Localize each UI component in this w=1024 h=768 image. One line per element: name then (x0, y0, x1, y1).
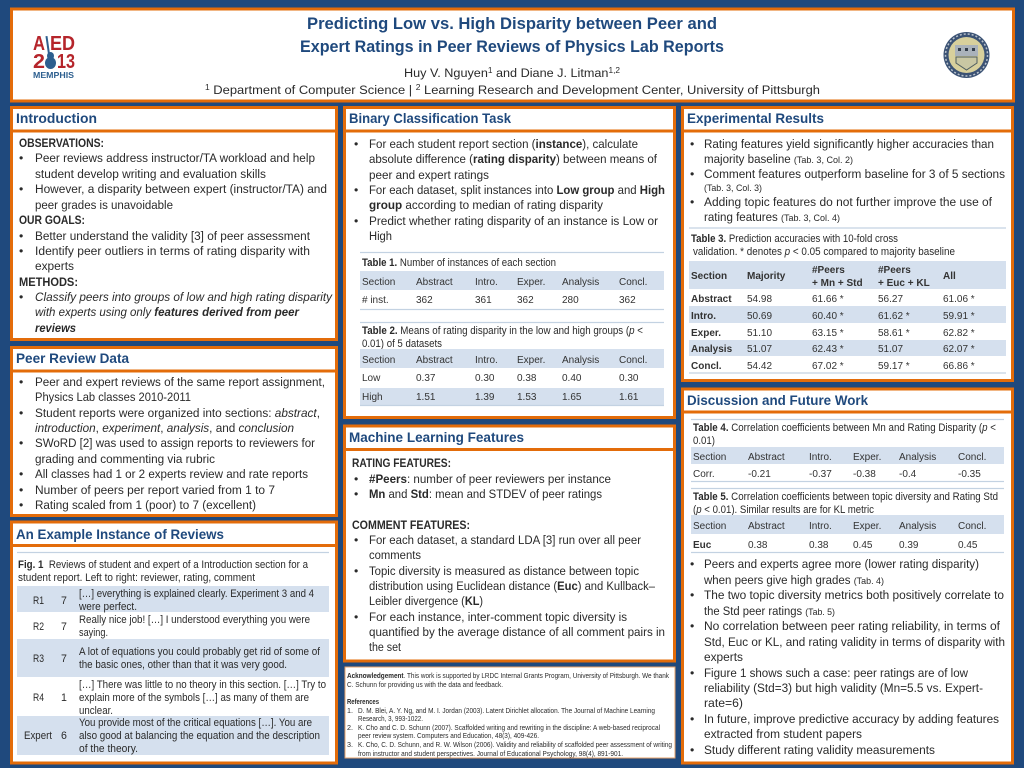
text block: observations, goals, methods: METHODS: (19, 275, 78, 289)
table 3: prediction accuracies: 54.98 (747, 294, 772, 305)
text block: discussion points: Figure 1 shows such a case: peer ratings are of low (704, 666, 968, 680)
table 1: instances per section: # inst. (362, 295, 389, 306)
text block: data description: Physics Lab classes 2010-2011 (35, 390, 191, 404)
table 5: correlation with rating std: Section (693, 521, 726, 532)
table: example reviews: of the theory. (79, 743, 138, 755)
panel: Introduction (10, 108, 338, 340)
table 2: means of rating disparity: 1.61 (619, 392, 639, 403)
table 3: prediction accuracies: #Peers (812, 265, 845, 276)
table 2: means of rating disparity: 0.40 (562, 373, 582, 384)
text block: results: rating features (Tab. 3, Col. 4) (704, 210, 840, 224)
text block: data description: Peer and expert reviews of the same report assignment, (35, 375, 325, 389)
text block: data description: • (19, 483, 23, 497)
text block: discussion points: extracted from student papers (704, 727, 862, 741)
references: 3. (347, 740, 353, 749)
table 3: prediction accuracies: Majority (747, 271, 786, 282)
text block: discussion points: Study different rating validity measurements (704, 743, 935, 757)
text block: rating and comment features: RATING FEATURES: (352, 456, 451, 470)
authors: 1 (488, 66, 493, 75)
text block: rating and comment features: • (354, 564, 358, 578)
affiliations: Learning Research and Development Center, University of Pittsburgh (420, 83, 820, 97)
text block: task description: group according to median of rating disparity (369, 198, 604, 212)
text block: discussion points: when peers give high grades (Tab. 4) (703, 573, 884, 587)
text block: task description: absolute difference (rating disparity) between means of (369, 152, 658, 166)
title (300, 14, 724, 56)
text block: observations, goals, methods: • (19, 182, 23, 196)
heading: Binary Classification Task: Binary Classification Task (349, 110, 511, 126)
text block: rating and comment features: Mn and Std: mean and STDEV of peer ratings (369, 487, 602, 501)
text block: rating and comment features: COMMENT FEATURES: (352, 518, 470, 532)
table 3: prediction accuracies: Section (691, 271, 727, 282)
text block: observations, goals, methods: Peer reviews address instructor/TA workload and help (35, 151, 315, 165)
icon: AIED 2013 Memphis logo: 13 (57, 51, 75, 73)
table: example reviews: 7 (61, 621, 67, 633)
text block: observations, goals, methods: • (19, 151, 23, 165)
table: example reviews: R1 (33, 595, 44, 607)
heading: An Example Instance of Reviews: An Example Instance of Reviews (16, 526, 224, 542)
text block: observations, goals, methods (19, 136, 333, 335)
references (347, 697, 672, 758)
table 1: instances per section: Exper. (517, 277, 545, 288)
table 2: means of rating disparity: 0.01) of 5 datasets (362, 338, 442, 350)
text block: results: • (690, 137, 694, 151)
table 3: prediction accuracies: 61.06 * (943, 294, 975, 305)
text block: data description: • (19, 406, 23, 420)
table 2: means of rating disparity: Analysis (562, 355, 599, 366)
references: K. Cho and C. D. Schunn (2007). Scaffolded writing and rewriting in the discipline: A web-based reciprocal (358, 723, 660, 732)
table 2: means of rating disparity: 1.65 (562, 392, 582, 403)
table 3: prediction accuracies: All (943, 271, 956, 282)
text block: task description: • (354, 183, 358, 197)
table 3: prediction accuracies: + Mn + Std (812, 278, 863, 289)
text block: discussion points: In future, improve predictive accuracy by adding features (704, 712, 999, 726)
table: example reviews: were perfect. (78, 601, 137, 613)
table 4: correlation with rating disparity: -0.21 (748, 469, 771, 480)
text block: rating and comment features: Leibler divergence (KL) (369, 594, 483, 608)
title: Expert Ratings in Peer Reviews of Physics Lab Reports (300, 37, 724, 56)
table 4: correlation with rating disparity: Concl. (958, 452, 986, 463)
text block: results: Comment features outperform baseline for 3 of 5 sections (704, 167, 1005, 181)
table 3: prediction accuracies: 61.62 * (878, 311, 910, 322)
table: example reviews: also good at balancing the equation and the description (79, 730, 320, 742)
table 3: prediction accuracies: 54.42 (747, 361, 772, 372)
text block: rating and comment features: distribution using Euclidean distance (Euc) and Kullback– (369, 579, 655, 593)
table 1: instances per section: 361 (475, 295, 492, 306)
text block: rating and comment features: • (354, 533, 358, 547)
table 2: means of rating disparity: 0.30 (619, 373, 639, 384)
text block: observations, goals, methods: • (19, 244, 23, 258)
text block: data description: Student reports were organized into sections: abstract, (35, 406, 320, 420)
table 3: prediction accuracies: 62.82 * (943, 328, 975, 339)
table 2: means of rating disparity: 0.30 (475, 373, 495, 384)
table 1: instances per section: 362 (416, 295, 433, 306)
panel: Machine Learning Features (343, 426, 676, 661)
text block: rating and comment features: Topic diversity is measured as distance between topic (369, 564, 639, 578)
acknowledgement: C. Schunn for providing us with the data and feedback. (347, 680, 503, 689)
table 3: prediction accuracies: 62.43 * (812, 344, 844, 355)
table 3: prediction accuracies: 58.61 * (878, 328, 910, 339)
figure caption: student report. Left to right: reviewer, rating, comment (18, 572, 255, 584)
text block: task description (354, 137, 665, 243)
text block: rating and comment features: For each instance, inter-comment topic diversity is (369, 610, 627, 624)
text block: rating and comment features: comments (369, 548, 421, 562)
table 3: prediction accuracies: 66.86 * (943, 361, 975, 372)
table 2: means of rating disparity: 1.53 (517, 392, 537, 403)
icon: AIED 2013 Memphis logo: A (33, 33, 45, 55)
figure caption (18, 559, 308, 584)
text block: rating and comment features: • (354, 610, 358, 624)
table 4: correlation with rating disparity: Section (693, 452, 726, 463)
table 2: means of rating disparity: 1.51 (416, 392, 436, 403)
table 3: prediction accuracies: Analysis (691, 344, 733, 355)
references: K. Cho, C. D. Schunn, and R. W. Wilson (2006). Validity and reliability of scaffolded peer assessment of writing (358, 740, 672, 749)
text block: discussion points: • (690, 588, 694, 602)
table: example reviews: the basic ones, other than that it was very good. (79, 659, 287, 671)
text block: observations, goals, methods: However, a disparity between expert (instructor/TA) and (35, 182, 327, 196)
references: References (347, 697, 379, 706)
table 3: prediction accuracies: 50.69 (747, 311, 772, 322)
table 3: prediction accuracies: Abstract (691, 294, 732, 305)
table 1: instances per section: 362 (619, 295, 636, 306)
table 3: prediction accuracies: Intro. (691, 311, 716, 322)
text block: results: • (690, 195, 694, 209)
acknowledgement: Acknowledgement. This work is supported by LRDC Internal Grants Program, University of Pittsburgh. We thank (347, 671, 669, 680)
icon: AIED 2013 Memphis logo: MEMPHIS (33, 70, 74, 80)
affiliations: Department of Computer Science | (210, 83, 416, 97)
references: peer review system. Computers and Education, 48(3), 409-426. (358, 731, 539, 740)
text block: task description: For each student report section (instance), calculate (369, 137, 638, 151)
table 5: correlation with rating std: Intro. (809, 521, 832, 532)
table 5: correlation with rating std: Concl. (958, 521, 986, 532)
table 4: correlation with rating disparity: 0.01) (693, 435, 715, 447)
panel: Binary Classification Task (343, 108, 676, 418)
header panel (12, 9, 1014, 101)
table 4: correlation with rating disparity: -0.35 (958, 469, 981, 480)
table 5: correlation with rating std: 0.38 (809, 540, 829, 551)
table 3: prediction accuracies: 59.17 * (878, 361, 910, 372)
panel: acknowledgement and references (345, 667, 675, 758)
table 1: instances per section: 362 (517, 295, 534, 306)
text block: discussion points: The two topic diversity metrics both positively correlate to (704, 588, 1004, 602)
text block: discussion points: • (690, 666, 694, 680)
text block: task description: For each dataset, split instances into Low group and High (369, 183, 665, 197)
panel: Peer Review Data (10, 348, 338, 516)
table 3: prediction accuracies: 51.10 (747, 328, 772, 339)
table 5: correlation with rating std: Exper. (853, 521, 881, 532)
text block: rating and comment features: #Peers: number of peer reviewers per instance (369, 472, 611, 486)
text block: observations, goals, methods: Classify peers into groups of low and high rating disparity (35, 290, 333, 304)
text block: discussion points: No correlation between peer rating reliability, in terms of (704, 619, 1001, 633)
table 3: prediction accuracies: 59.91 * (943, 311, 975, 322)
panel: Discussion and Future Work (681, 389, 1014, 763)
references: from instructor and student perspectives. Journal of Educational Psychology, 98(4), 891-901. (358, 749, 623, 758)
text block: task description: High (369, 229, 392, 243)
authors: Huy V. Nguyen (404, 66, 485, 80)
text block: observations, goals, methods: experts (35, 259, 74, 273)
affiliations: 1 (205, 83, 210, 92)
heading: Machine Learning Features: Machine Learning Features (349, 429, 524, 445)
table 2: means of rating disparity: 0.38 (517, 373, 537, 384)
text block: rating and comment features: • (354, 472, 358, 486)
table 3: prediction accuracies: validation. * denotes p < 0.05 compared to majority baseline (693, 246, 955, 258)
text block: discussion points: the Std peer ratings (Tab. 5) (704, 604, 835, 618)
text block: task description: • (354, 137, 358, 151)
text block: data description: • (19, 375, 23, 389)
text block: discussion points: • (690, 557, 694, 571)
text block: data description: • (19, 498, 23, 512)
table 3: prediction accuracies: 56.27 (878, 294, 903, 305)
table 1: instances per section: Section (362, 277, 395, 288)
text block: data description: • (19, 467, 23, 481)
text block: observations, goals, methods: peer grades is unavoidable (35, 198, 173, 212)
references: 1. (347, 706, 353, 715)
icon: University of Pittsburgh seal (944, 32, 990, 78)
table 3: prediction accuracies: 61.66 * (812, 294, 844, 305)
text block: discussion points: rate=6) (704, 696, 743, 710)
table 5: correlation with rating std: Abstract (748, 521, 785, 532)
table 2: means of rating disparity: Section (362, 355, 395, 366)
table: example reviews: explain more of the symbols […] as many of them are (79, 692, 309, 704)
text block: data description (19, 375, 325, 512)
table: example reviews: […] everything is explained clearly. Experiment 3 and 4 (79, 588, 314, 600)
authors: 1,2 (608, 66, 621, 75)
text block: task description: peer and expert ratings (369, 168, 489, 182)
table 4: correlation with rating disparity: Analysis (899, 452, 936, 463)
table: example reviews: R4 (33, 692, 44, 704)
text block: rating and comment features: quantified by the average distance of all comment pairs in (369, 625, 665, 639)
table 4: correlation with rating disparity: -0.4 (899, 469, 917, 480)
table: example reviews: A lot of equations you could probably get rid of some of (79, 646, 320, 658)
table 2: means of rating disparity: 0.37 (416, 373, 436, 384)
icon: AIED 2013 Memphis logo: 2 (33, 51, 45, 73)
table: example reviews: 6 (61, 730, 67, 742)
figure caption: Fig. 1 Reviews of student and expert of a Introduction section for a (18, 559, 308, 571)
text block: results: Adding topic features do not further improve the use of (704, 195, 993, 209)
title: Predicting Low vs. High Disparity between Peer and (307, 14, 717, 33)
table: example reviews (17, 586, 329, 755)
table 4: correlation with rating disparity: Abstract (748, 452, 785, 463)
table 3: prediction accuracies: Concl. (691, 361, 722, 372)
table 5: correlation with rating std: 0.38 (748, 540, 768, 551)
table 5: correlation with rating std: 0.45 (958, 540, 978, 551)
text block: data description: introduction, experiment, analysis, and conclusion (35, 421, 294, 435)
text block: discussion points: Peers and experts agree more (lower rating disparity) (704, 557, 979, 571)
references: 2. (347, 723, 353, 732)
table: example reviews: Really nice job! […] I understood everything you were (79, 614, 310, 626)
table 3: prediction accuracies: 60.40 * (812, 311, 844, 322)
text block: rating and comment features: For each dataset, a standard LDA [3] run over all peer (369, 533, 641, 547)
table 3: prediction accuracies: 67.02 * (812, 361, 844, 372)
text block: task description: • (354, 214, 358, 228)
text block: discussion points: Std, Euc or KL, and rating validity in terms of disparity with (704, 635, 1005, 649)
text block: discussion points: • (690, 619, 694, 633)
table: example reviews: […] There was little to no theory in this section. […] Try to (79, 679, 326, 691)
table: example reviews: 1 (61, 692, 67, 704)
text block: observations, goals, methods: • (19, 229, 23, 243)
table 5: correlation with rating std: 0.45 (853, 540, 873, 551)
table 2: means of rating disparity: High (362, 392, 383, 403)
table 2: means of rating disparity (360, 325, 664, 406)
text block: discussion points: • (690, 712, 694, 726)
text block: discussion points: • (690, 743, 694, 757)
heading: Peer Review Data: Peer Review Data (16, 350, 129, 366)
table 5: correlation with rating std: Analysis (899, 521, 936, 532)
text block: observations, goals, methods: OBSERVATIONS: (19, 136, 104, 150)
table: example reviews: R2 (33, 621, 44, 633)
text block: data description: SWoRD [2] was used to assign reports to reviewers for (35, 436, 315, 450)
heading: Introduction: Introduction (16, 110, 97, 126)
text block: data description: Number of peers per report varied from 1 to 7 (35, 483, 275, 497)
table 3: prediction accuracies: + Euc + KL (878, 278, 930, 289)
table 3: prediction accuracies (689, 233, 1006, 373)
text block: task description: Predict whether rating disparity of an instance is Low or (369, 214, 658, 228)
table 4: correlation with rating disparity: Exper. (853, 452, 881, 463)
table 3: prediction accuracies: 51.07 (747, 344, 772, 355)
authors: and Diane J. Litman (492, 66, 608, 80)
table 2: means of rating disparity: Abstract (416, 355, 453, 366)
text block: observations, goals, methods: with experts using only features derived from peer (35, 305, 300, 319)
table 1: instances per section: 280 (562, 295, 579, 306)
text block: results: • (690, 167, 694, 181)
text block: discussion points: experts (704, 650, 743, 664)
text block: observations, goals, methods: Better understand the validity [3] of peer assessment (35, 229, 311, 243)
text block: rating and comment features: • (354, 487, 358, 501)
table 2: means of rating disparity: Low (362, 373, 381, 384)
table: example reviews: saying. (79, 627, 108, 639)
table 1: instances per section: Table 1. Number of instances of each section (362, 257, 556, 269)
table 3: prediction accuracies: Table 3. Prediction accuracies with 10-fold cross (691, 233, 898, 245)
icon: AIED 2013 Memphis logo (33, 33, 75, 80)
table 2: means of rating disparity: Intro. (475, 355, 498, 366)
table 2: means of rating disparity: 1.39 (475, 392, 495, 403)
table 3: prediction accuracies: #Peers (878, 265, 911, 276)
table 4: correlation with rating disparity: -0.38 (853, 469, 876, 480)
table 4: correlation with rating disparity: Table 4. Correlation coefficients between Mn and Rating Disparity (p < (693, 422, 996, 434)
text block: data description: • (19, 436, 23, 450)
panel: Experimental Results (681, 108, 1014, 380)
table 2: means of rating disparity: Table 2. Means of rating disparity in the low and high groups (p < (362, 325, 643, 337)
text block: observations, goals, methods: • (19, 290, 23, 304)
icon: AIED 2013 Memphis logo: ED (50, 33, 75, 55)
text block: rating and comment features (352, 456, 665, 654)
table 4: correlation with rating disparity (691, 422, 1004, 482)
table 1: instances per section: Concl. (619, 277, 647, 288)
references: Research, 3, 993-1022. (358, 714, 423, 723)
text block: discussion points (690, 557, 1005, 757)
table: example reviews: Expert (24, 730, 52, 742)
table 3: prediction accuracies: 62.07 * (943, 344, 975, 355)
table 5: correlation with rating std: Euc (693, 540, 712, 551)
table 5: correlation with rating std: 0.39 (899, 540, 919, 551)
table 1: instances per section: Intro. (475, 277, 498, 288)
text block: rating and comment features: the set (369, 640, 402, 654)
acknowledgement (347, 671, 669, 689)
text block: observations, goals, methods: reviews (35, 321, 76, 335)
text block: observations, goals, methods: Identify peer outliers in terms of rating disparity with (35, 244, 310, 258)
text block: results: majority baseline (Tab. 3, Col. 2) (704, 152, 853, 166)
text block: results (690, 137, 1005, 224)
text block: results: (Tab. 3, Col. 3) (704, 183, 762, 194)
table 5: correlation with rating std (691, 491, 1004, 552)
text block: data description: grading and commenting via rubric (35, 452, 215, 466)
table 1: instances per section: Analysis (562, 277, 599, 288)
table 2: means of rating disparity: Exper. (517, 355, 545, 366)
table 4: correlation with rating disparity: -0.37 (809, 469, 832, 480)
table: example reviews: R3 (33, 653, 44, 665)
table 5: correlation with rating std: Table 5. Correlation coefficients between topic diversity and Rating Std (693, 491, 998, 503)
heading: Experimental Results: Experimental Results (687, 110, 824, 126)
table 3: prediction accuracies: 51.07 (878, 344, 903, 355)
table 3: prediction accuracies: 63.15 * (812, 328, 844, 339)
table: example reviews: unclear. (79, 705, 113, 717)
table: example reviews: 7 (61, 595, 67, 607)
table 3: prediction accuracies: Exper. (691, 328, 721, 339)
text block: discussion points: reliability (Std=3) but high validity (Mn=5.5 vs. Expert- (704, 681, 983, 695)
table 1: instances per section: Abstract (416, 277, 453, 288)
affiliations: 2 (416, 83, 421, 92)
text block: observations, goals, methods: student develop writing and evaluation skills (35, 167, 266, 181)
text block: data description: Rating scaled from 1 (poor) to 7 (excellent) (35, 498, 256, 512)
table 4: correlation with rating disparity: Corr. (693, 469, 715, 480)
references: D. M. Blei, A. Y. Ng, and M. I. Jordan (2003). Latent Dirichlet allocation. The Journal of Machine Learning (358, 706, 655, 715)
heading: Discussion and Future Work: Discussion and Future Work (687, 392, 868, 408)
table 5: correlation with rating std: (p < 0.01). Similar results are for KL metric (693, 504, 875, 516)
text block: results: Rating features yield significantly higher accuracies than (704, 137, 994, 151)
table 4: correlation with rating disparity: Intro. (809, 452, 832, 463)
table: example reviews: You provide most of the critical equations […]. You are (79, 717, 312, 729)
table 2: means of rating disparity: Concl. (619, 355, 647, 366)
table 1: instances per section (360, 257, 664, 310)
text block: data description: All classes had 1 or 2 experts review and rate reports (35, 467, 308, 481)
table: example reviews: 7 (61, 653, 67, 665)
panel: An Example Instance of Reviews (10, 522, 338, 763)
text block: observations, goals, methods: OUR GOALS: (19, 213, 85, 227)
